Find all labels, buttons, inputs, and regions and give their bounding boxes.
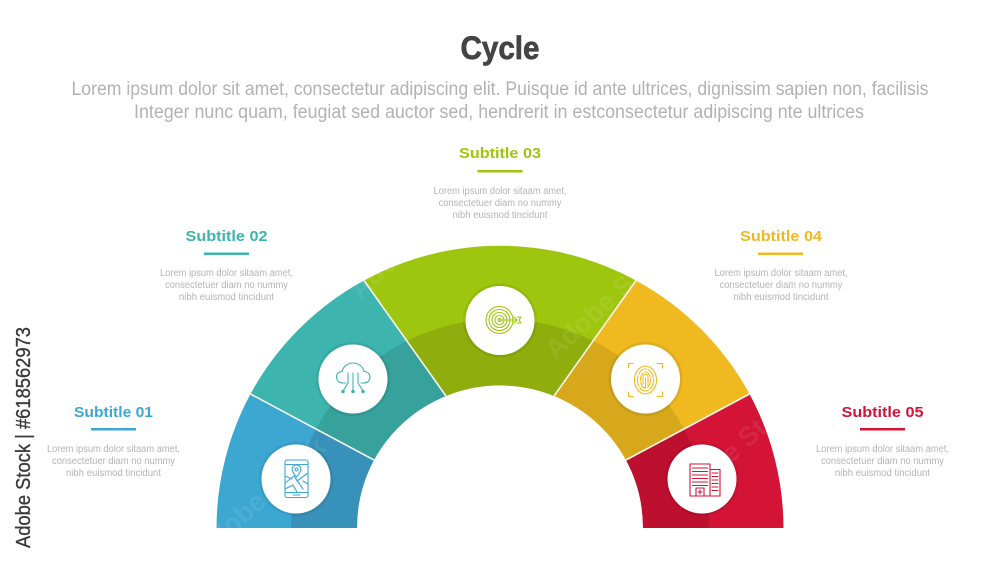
icon badge 02: cloud network xyxy=(316,342,390,416)
stock watermark pattern: Adobe Stock xyxy=(189,431,332,563)
semicircle cycle diagram xyxy=(216,246,784,528)
intro text: Integer nunc quam, feugiat sed auctor sed, hendrerit in estconsectetur adipiscing nte ultrices xyxy=(134,102,864,123)
callout: subtitle 05: Lorem ipsum dolor sitaam amet, xyxy=(816,444,949,455)
segment 04: yellow xyxy=(554,280,750,460)
segment 03: green xyxy=(364,246,636,396)
segment 05: red xyxy=(626,394,784,528)
callout: subtitle 02: Lorem ipsum dolor sitaam amet, xyxy=(160,268,293,279)
callout: subtitle 02: Subtitle 02 xyxy=(186,228,268,245)
callout: subtitle 03: consectetuer diam no nummy xyxy=(438,198,562,209)
callout: subtitle 01: consectetuer diam no nummy xyxy=(52,456,175,467)
callout: subtitle 03 xyxy=(434,145,566,221)
icon badge 04: fingerprint xyxy=(608,342,682,416)
callout: subtitle 02: consectetuer diam no nummy xyxy=(165,280,288,291)
stock watermark pattern: Adobe Stock xyxy=(164,91,307,224)
callout: subtitle 01 xyxy=(47,404,180,479)
icon badge 01: phone map xyxy=(259,442,333,516)
icon badge 03: target xyxy=(463,284,537,358)
stock watermark pattern: Adobe Stock xyxy=(644,133,787,266)
stock watermark pattern: Adobe Stock xyxy=(539,231,682,364)
callout: subtitle 02: nibh euismod tincidunt xyxy=(179,292,274,303)
intro text: Lorem ipsum dolor sit amet, consectetur adipiscing elit. Puisque id ante ultrices, dignissim sapien non, facilisis xyxy=(72,79,928,100)
title: Cycle xyxy=(460,30,540,66)
callout: subtitle 04: consectetuer diam no nummy xyxy=(720,280,842,291)
segment 02: teal xyxy=(250,280,446,460)
callout: subtitle 05 xyxy=(816,404,949,479)
stock watermark pattern: Adobe Stock xyxy=(344,171,487,304)
callout: subtitle 04: Subtitle 04 xyxy=(740,228,823,245)
callout: subtitle 03: Lorem ipsum dolor sitaam amet, xyxy=(434,186,566,197)
stock watermark pattern: Adobe Stock xyxy=(209,223,352,356)
callout: subtitle 01: Subtitle 01 xyxy=(74,404,153,421)
segment 01: blue xyxy=(216,394,374,528)
intro text xyxy=(72,79,928,123)
callout: subtitle 05: nibh euismod tincidunt xyxy=(835,468,930,479)
stock watermark pattern: Adobe Stock xyxy=(664,381,807,514)
callout: subtitle 03: nibh euismod tincidunt xyxy=(452,210,548,221)
stock watermark pattern: Adobe Stock xyxy=(44,381,187,514)
callout: subtitle 01: nibh euismod tincidunt xyxy=(66,468,161,479)
segment dividers xyxy=(250,280,750,460)
icon badge 05: office buildings xyxy=(665,442,739,516)
callout: subtitle 05: consectetuer diam no nummy xyxy=(821,456,944,467)
stock id vertical label: Adobe Stock | #618562973 xyxy=(13,327,35,548)
stock watermark pattern xyxy=(39,49,807,563)
callout: subtitle 04 xyxy=(714,228,848,303)
callout: subtitle 04: nibh euismod tincidunt xyxy=(734,292,829,303)
callout: subtitle 05: Subtitle 05 xyxy=(842,404,924,421)
callout: subtitle 04: Lorem ipsum dolor sitaam amet, xyxy=(714,268,848,279)
callout: subtitle 01: Lorem ipsum dolor sitaam amet, xyxy=(47,444,180,455)
callout: subtitle 02 xyxy=(160,228,293,303)
callout: subtitle 03: Subtitle 03 xyxy=(459,145,541,162)
stock watermark pattern: Adobe Stock xyxy=(39,49,182,182)
